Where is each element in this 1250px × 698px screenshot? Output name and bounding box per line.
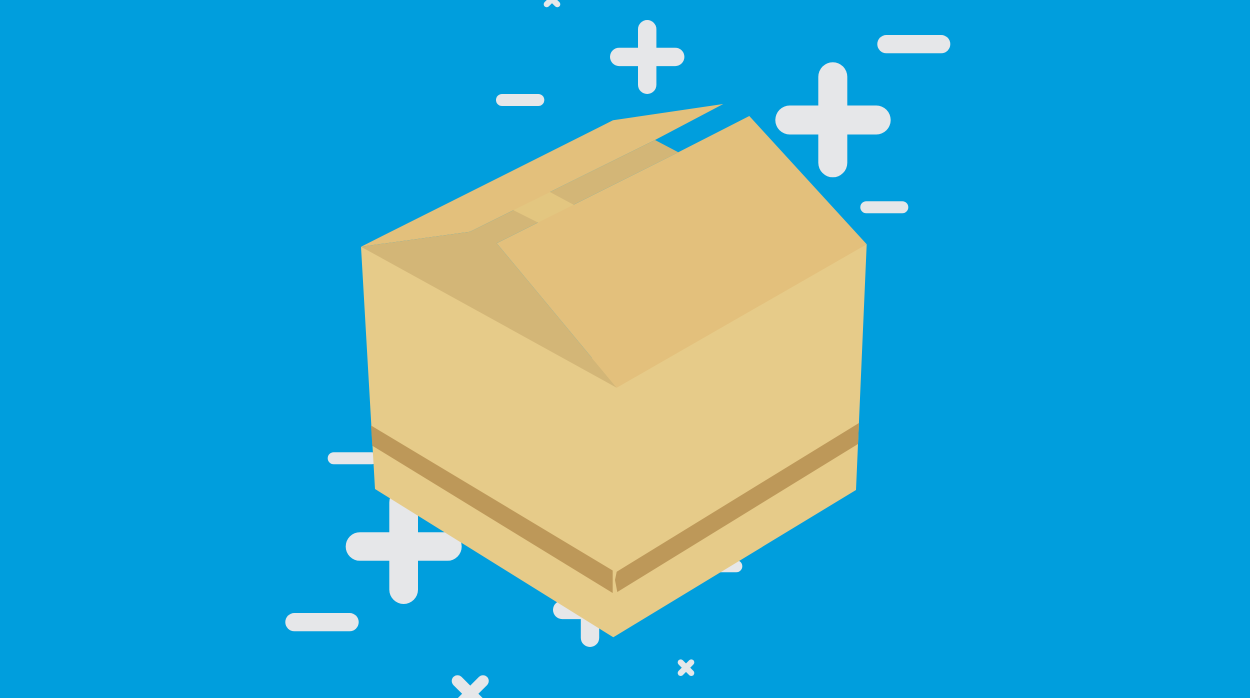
back flap [361, 104, 723, 247]
icon: large plus bottom left [346, 488, 462, 604]
icon: large plus top right [775, 62, 891, 177]
icon: long minus bottom left [285, 613, 359, 631]
icon: short minus top left [496, 94, 544, 106]
front flap [497, 116, 867, 388]
icon: small cross top [547, 0, 557, 4]
icon: small plus bottom [553, 573, 627, 647]
packing tape: right side [615, 423, 859, 592]
box [361, 104, 867, 637]
icon: small cross bottom right [681, 662, 691, 673]
icon: small plus top [610, 20, 684, 94]
inner shadow of open box [361, 140, 678, 388]
icon: large cross bottom [458, 681, 483, 698]
icon: short minus bottom right [694, 560, 742, 572]
packing tape: left side [371, 426, 613, 593]
icon: long minus top right [877, 35, 950, 53]
icon: short minus left [328, 452, 378, 464]
tape on top seam [511, 192, 576, 224]
icon: short minus right [860, 201, 908, 213]
box body [361, 244, 867, 637]
